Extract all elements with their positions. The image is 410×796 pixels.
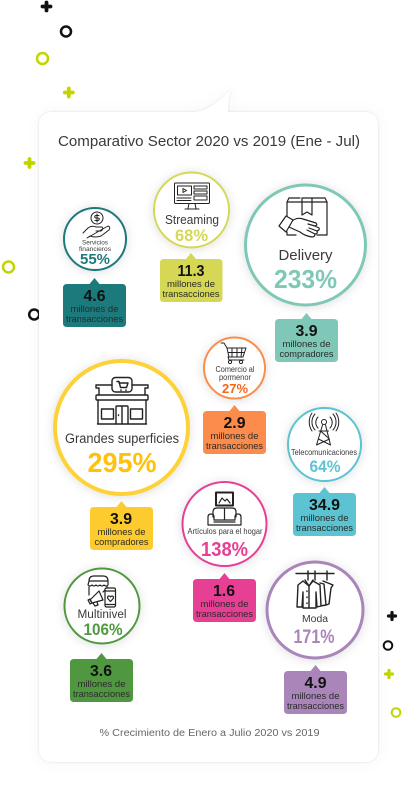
- icon: shopping cart: [221, 343, 246, 364]
- item: multinivel: [64, 568, 140, 644]
- icon: sofa with picture: [208, 492, 241, 525]
- percentage: 233%: [274, 264, 337, 294]
- data box: grandes superficies: millones de: [98, 527, 146, 538]
- item: servicios financieros: [64, 208, 126, 270]
- label: Grandes superficies: [65, 431, 179, 446]
- data box: servicios financieros: transacciones: [66, 314, 123, 325]
- footer note: % Crecimiento de Enero a Julio 2020 vs 2019: [100, 728, 320, 739]
- data box: grandes superficies: [90, 501, 153, 550]
- data box: servicios financieros: millones de: [70, 304, 118, 315]
- item: delivery: [246, 185, 366, 305]
- label: Multinivel: [78, 609, 126, 621]
- data box: moda: millones de: [292, 691, 340, 702]
- label line 2: pormenor: [219, 373, 251, 382]
- icon: monitor with video: [174, 183, 210, 209]
- item: articulos para el hogar: [182, 482, 266, 566]
- data box: comercio al pormenor: transacciones: [206, 441, 263, 452]
- data box: delivery: [275, 313, 338, 362]
- data box: articulos para el hogar: millones de: [200, 599, 248, 610]
- icon: clothes rail: [296, 571, 334, 608]
- icon: hand with coin: [83, 212, 110, 238]
- label: Delivery: [278, 247, 333, 264]
- data box: multinivel: millones de: [78, 679, 126, 690]
- data box: telecomunicaciones: millones de: [300, 513, 348, 524]
- data box: delivery: 3.9: [296, 323, 318, 340]
- data box: telecomunicaciones: [293, 487, 356, 536]
- data box: delivery: compradores: [280, 349, 334, 360]
- percentage: 171%: [294, 627, 335, 648]
- percentage: 295%: [88, 447, 157, 478]
- label: Servicios: [82, 240, 109, 246]
- data box: articulos para el hogar: transacciones: [196, 609, 253, 620]
- data box: grandes superficies: 3.9: [110, 511, 132, 528]
- data box: articulos para el hogar: [193, 573, 256, 622]
- icon: supermarket storefront: [96, 378, 148, 424]
- data box: streaming: transacciones: [162, 289, 220, 300]
- percentage: 27%: [222, 381, 248, 396]
- item: streaming: [154, 172, 229, 248]
- item: telecomunicaciones: [288, 408, 361, 481]
- data box: comercio al pormenor: [203, 405, 266, 454]
- label: Telecomunicaciones: [291, 448, 357, 457]
- data box: multinivel: transacciones: [73, 689, 130, 700]
- data box: multinivel: 3.6: [90, 663, 112, 680]
- icon: store, megaphone and phone: [88, 576, 116, 607]
- data box: moda: 4.9: [304, 675, 327, 692]
- data box: servicios financieros: 4.6: [84, 288, 106, 305]
- data box: telecomunicaciones: 34.9: [309, 497, 340, 514]
- data box: comercio al pormenor: millones de: [210, 431, 258, 442]
- data box: moda: [284, 665, 347, 714]
- percentage: 55%: [80, 251, 110, 268]
- percentage: 106%: [84, 620, 122, 639]
- item: grandes superficies: [55, 361, 188, 494]
- data box: streaming: [160, 253, 222, 302]
- label: Streaming: [165, 212, 219, 227]
- item: comercio al pormenor: [204, 338, 265, 398]
- percentage: 68%: [175, 226, 208, 245]
- percentage: 138%: [201, 539, 248, 561]
- label: Moda: [302, 614, 328, 625]
- data box: servicios financieros: [63, 278, 126, 327]
- icon: antenna tower: [309, 413, 339, 445]
- title: Comparativo Sector 2020 vs 2019 (Ene - Jul): [58, 134, 360, 150]
- icon: hand holding box: [279, 198, 327, 237]
- data box: grandes superficies: compradores: [94, 537, 149, 548]
- label: Comercio al: [216, 365, 255, 374]
- data box: comercio al pormenor: 2.9: [224, 415, 246, 432]
- data box: telecomunicaciones: transacciones: [296, 523, 353, 534]
- data box: articulos para el hogar: 1.6: [213, 583, 235, 600]
- data box: streaming: millones de: [167, 279, 215, 290]
- label line 2: financieros: [79, 246, 112, 253]
- data box: streaming: 11.3: [178, 263, 205, 280]
- item: moda: [267, 562, 363, 658]
- data box: moda: transacciones: [287, 701, 344, 712]
- percentage: 64%: [310, 457, 340, 476]
- data box: multinivel: [70, 653, 133, 702]
- data box: delivery: millones de: [282, 339, 330, 350]
- panel: speech bubble card: [39, 87, 378, 762]
- label: Artículos para el hogar: [188, 526, 263, 536]
